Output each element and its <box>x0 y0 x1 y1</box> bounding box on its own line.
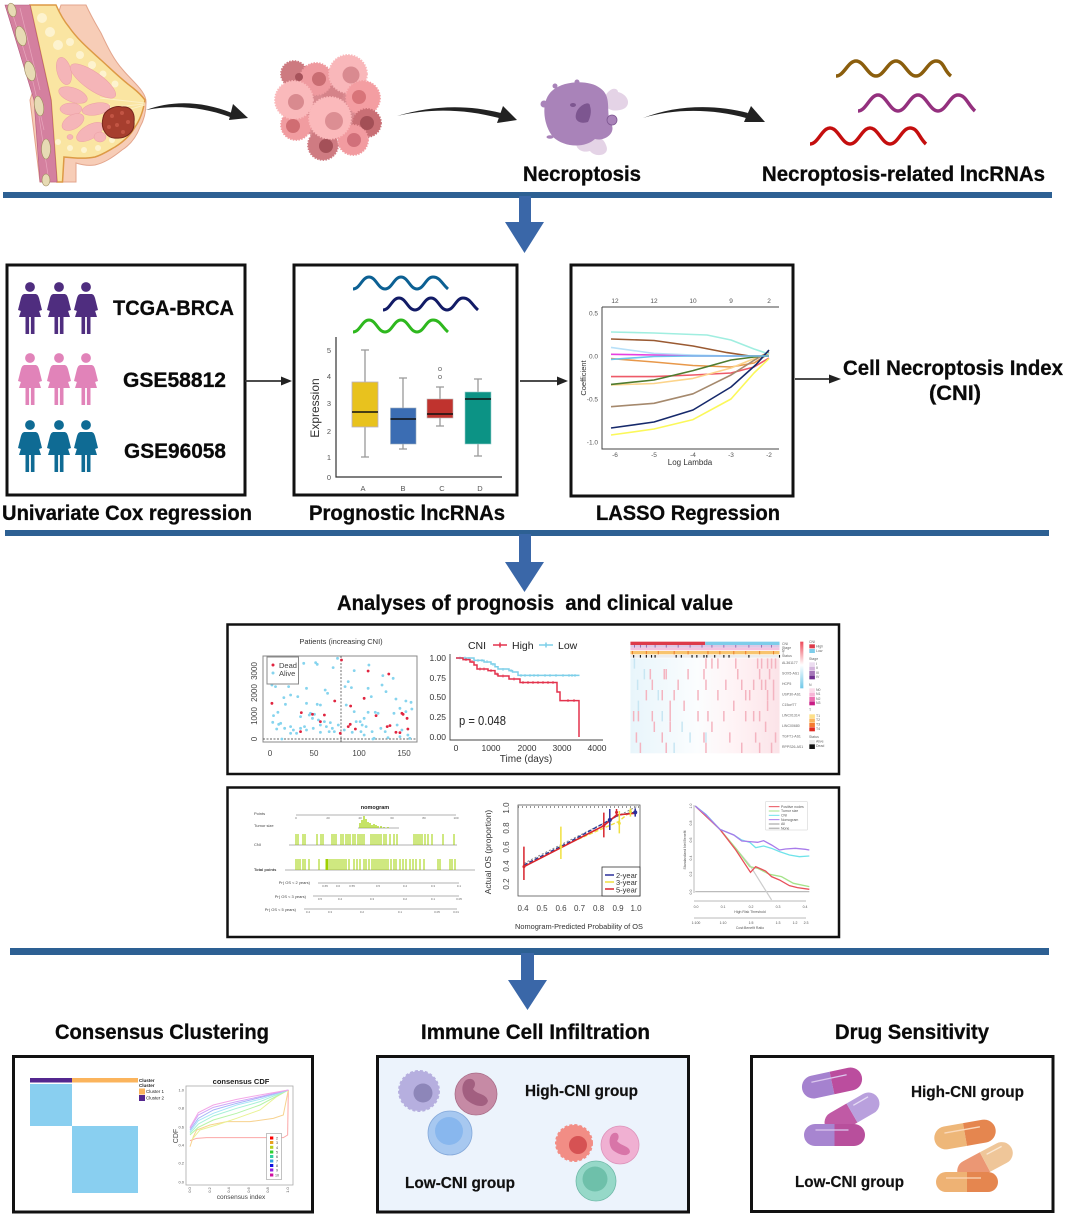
heatmap: C15orf77 <box>782 703 796 707</box>
consensus heatmap: Cluster 1 <box>146 1089 165 1094</box>
box plot: 4 <box>327 372 331 381</box>
heatmap: T4 <box>816 727 820 731</box>
nomogram: 80 <box>422 816 426 820</box>
consensus heatmap: Cluster <box>139 1083 155 1088</box>
consensus heatmap: Cluster <box>139 1078 155 1083</box>
CDF legend: 9 <box>276 1168 278 1172</box>
scatter legend <box>267 657 298 684</box>
decision curve: 0.8 <box>689 821 693 825</box>
consensus heatmap: Cluster 2 <box>146 1096 165 1100</box>
icon: red immune cell <box>556 1125 592 1161</box>
heatmap: Status <box>782 654 792 658</box>
nomogram: 40 <box>358 816 362 820</box>
LASSO coefficient chart: Log Lambda <box>668 458 713 467</box>
nomogram: Points <box>254 811 265 816</box>
nomogram: 0.3 <box>431 884 435 888</box>
decision curve: Nomogram <box>781 818 798 822</box>
CDF legend: 3 <box>276 1141 278 1145</box>
heading: Cell Necroptosis Index (CNI) <box>843 356 1063 405</box>
calibration plot: 0.5 <box>536 904 548 913</box>
box plot: 2 <box>327 427 331 436</box>
decision curve: 0.6 <box>689 838 693 842</box>
heatmap: Alive <box>816 740 824 744</box>
arrow: cells to necroptosis <box>397 106 517 123</box>
nomogram: 0.1 <box>398 910 402 914</box>
scatter plot: patients by CNI: 2000 <box>250 684 259 702</box>
Kaplan-Meier curve: 3000 <box>553 743 572 753</box>
calibration plot: 0.8 <box>502 822 511 834</box>
icon: pink women <box>18 353 98 405</box>
icon: necroptotic cell <box>540 80 628 155</box>
heading: Cell Necroptosis Index (CNI): (CNI) <box>929 381 981 405</box>
nomogram: 0.65 <box>322 884 328 888</box>
heatmap: II <box>816 666 818 670</box>
calibration plot: 1.0 <box>502 802 511 814</box>
arrow: cohorts to lncRNAs <box>245 376 292 386</box>
consensus heatmap <box>30 1078 165 1193</box>
nomogram: 0.01 <box>453 910 459 914</box>
consensus CDF chart: 1.0 <box>285 1186 290 1193</box>
nomogram: 0.3 <box>328 910 332 914</box>
decision curve: 0.4 <box>689 856 693 860</box>
heatmap: T2 <box>816 718 820 722</box>
calibration legend: 5-year <box>616 886 638 894</box>
consensus CDF chart: 0.0 <box>187 1186 192 1193</box>
consensus CDF chart: 0.4 <box>226 1186 231 1193</box>
label: Low-CNI group: Low-CNI group <box>795 1174 904 1191</box>
consensus CDF chart: 1.0 <box>178 1088 185 1092</box>
Kaplan-Meier curve: 1000 <box>482 743 501 753</box>
calibration plot: Actual OS (proportion) <box>483 810 493 894</box>
decision curve: Cost:Benefit Ratio <box>736 926 764 930</box>
Kaplan-Meier curve: 1.00 <box>429 653 446 663</box>
nomogram: 0.05 <box>434 910 440 914</box>
scatter plot: patients by CNI: 150 <box>397 749 411 758</box>
heatmap: USP30-AS1 <box>782 692 801 696</box>
CDF legend: 5 <box>276 1150 278 1154</box>
LASSO coefficient chart: 10 <box>689 298 697 305</box>
decision curve: 1:2 <box>793 921 797 925</box>
LASSO coefficient chart: -1.0 <box>587 440 598 446</box>
decision curve: 1:100 <box>692 921 700 925</box>
scatter plot: patients by CNI: Patients (increasing CNI) <box>299 637 383 646</box>
box plot: 0 <box>327 473 331 482</box>
heatmap <box>630 640 824 753</box>
CDF legend: 8 <box>276 1164 278 1168</box>
decision curve: None <box>781 826 789 830</box>
nomogram: 0.2 <box>360 910 364 914</box>
heatmap: I <box>816 662 817 666</box>
CDF legend: 7 <box>276 1160 278 1164</box>
heatmap: N0 <box>816 688 821 692</box>
heatmap: N <box>809 683 812 687</box>
icon: orange pills <box>932 1118 1017 1192</box>
calibration legend: 3-year <box>616 878 638 887</box>
heatmap: IV <box>816 675 820 679</box>
icon: pink neutrophil <box>601 1126 639 1164</box>
Kaplan-Meier curve: Time (days) <box>500 754 552 765</box>
decision curve: 1.0 <box>689 804 693 808</box>
consensus CDF chart: 0.0 <box>178 1180 185 1184</box>
LASSO coefficient chart: -2 <box>766 452 772 459</box>
nomogram: 0.55 <box>349 884 355 888</box>
heading: Univariate Cox regression: Univariate Cox regression <box>2 501 252 525</box>
arrow: LASSO to CNI <box>795 374 841 384</box>
Kaplan-Meier curve: High <box>512 640 534 652</box>
heatmap: N <box>782 648 785 652</box>
heatmap: CNI <box>809 640 815 644</box>
heading: Necroptosis-related lncRNAs: Necroptosis-related lncRNAs <box>762 162 1045 186</box>
Kaplan-Meier curve: 0.50 <box>429 692 446 702</box>
heatmap: Dead <box>816 744 824 748</box>
Kaplan-Meier curve: 4000 <box>588 743 607 753</box>
Kaplan-Meier curve: 0.75 <box>429 673 446 683</box>
heatmap: HCP5 <box>782 682 791 686</box>
heatmap: CNI <box>782 642 788 646</box>
heading: Prognostic lncRNAs: Prognostic lncRNAs <box>309 501 505 525</box>
consensus CDF chart: CDF <box>173 1129 180 1143</box>
LASSO coefficient chart: -4 <box>690 452 696 459</box>
decision curve: 1:3 <box>776 921 780 925</box>
heatmap: Stage <box>782 646 791 650</box>
heading: Drug Sensitivity: Drug Sensitivity <box>835 1020 989 1044</box>
box plot: 5 <box>327 346 331 355</box>
panel: prognostic lncRNAs box plot <box>294 265 517 495</box>
divider bar 3 <box>10 948 1049 955</box>
heatmap: LINC00680 <box>782 724 800 728</box>
decision curve: All <box>781 822 785 826</box>
heading: Consensus Clustering: Consensus Clustering <box>55 1020 269 1044</box>
calibration plot: 0.8 <box>593 904 605 913</box>
box plot: C <box>439 484 445 493</box>
scatter plot: patients by CNI <box>250 637 417 758</box>
heatmap: SOX5-AS1 <box>782 672 799 676</box>
icon: teal lymphocyte <box>576 1161 616 1201</box>
consensus CDF chart: 0.4 <box>178 1142 185 1148</box>
heatmap: Stage <box>809 657 818 661</box>
heading: Immune Cell Infiltration: Immune Cell Infiltration <box>421 1020 650 1044</box>
heading: Necroptosis: Necroptosis <box>523 162 641 186</box>
heatmap: III <box>816 671 819 675</box>
heatmap: N2 <box>816 697 821 701</box>
arrow: down 1 <box>505 196 544 253</box>
panel: LASSO regression <box>571 265 793 496</box>
nomogram: Pr( OS < 5 years) <box>265 907 297 912</box>
panel: immune cell infiltration <box>378 1056 688 1212</box>
heatmap: T <box>782 651 785 655</box>
CDF legend: 6 <box>276 1155 278 1159</box>
calibration plot <box>483 802 643 931</box>
LASSO coefficient chart: -0.5 <box>587 396 598 404</box>
panel: consensus clustering <box>14 1056 312 1212</box>
decision curve: 0.2 <box>749 905 753 909</box>
nomogram: 0.05 <box>456 897 462 901</box>
arrow: down 3 <box>508 953 547 1010</box>
panel: prognosis plots <box>228 624 839 774</box>
Kaplan-Meier curve: Low <box>558 640 578 652</box>
decision curve: High Risk Threshold <box>734 910 766 914</box>
heatmap: TGFT1-AS1 <box>782 734 801 738</box>
nomogram: nomogram <box>361 805 389 811</box>
decision curve: 0.0 <box>689 890 693 894</box>
nomogram: 60 <box>390 816 394 820</box>
heatmap: LINC01314 <box>782 714 800 718</box>
consensus CDF chart: 0.2 <box>178 1160 185 1166</box>
nomogram: 0.5 <box>318 897 322 901</box>
decision curve <box>683 802 809 930</box>
nomogram: 20 <box>326 816 330 820</box>
calibration plot: 0.7 <box>574 904 586 913</box>
scatter plot: patients by CNI: 0 <box>268 749 273 758</box>
heatmap: Status <box>809 735 819 739</box>
arrow: necroptosis to lncRNAs <box>643 106 765 122</box>
box plot: D <box>477 484 483 493</box>
decision curve: 0.1 <box>721 905 725 909</box>
icon: blue lymphocyte <box>428 1111 472 1155</box>
nomogram: 0.3 <box>370 897 374 901</box>
scatter plot: patients by CNI: 50 <box>310 749 319 758</box>
icon: purple pills <box>800 1065 883 1146</box>
scatter plot: patients by CNI: 3000 <box>250 662 259 680</box>
calibration plot: 0.9 <box>612 904 624 913</box>
nomogram: 0.5 <box>376 884 380 888</box>
Kaplan-Meier curve <box>429 640 607 765</box>
decision curve: 1:5 <box>749 921 753 925</box>
nomogram: 0.4 <box>338 897 342 901</box>
label: GSE58812: GSE58812 <box>123 368 226 392</box>
calibration plot: 0.2 <box>502 878 511 890</box>
calibration plot: 1.0 <box>630 904 642 913</box>
calibration plot: 0.6 <box>502 841 511 853</box>
nomogram: 0.4 <box>306 910 310 914</box>
LASSO coefficient chart: 9 <box>729 298 733 305</box>
consensus CDF chart: 0.8 <box>178 1106 185 1110</box>
decision curve: Positive nodes <box>781 805 804 809</box>
LASSO coefficient chart: -3 <box>728 452 734 459</box>
scatter plot: patients by CNI: 1000 <box>250 707 259 725</box>
nomogram: 0.6 <box>336 884 340 888</box>
decision curve: Tumor size <box>781 809 798 813</box>
box plot: A <box>360 484 366 493</box>
Kaplan-Meier curve: 0.00 <box>429 732 446 742</box>
LASSO coefficient chart: Coefficient <box>579 359 588 396</box>
heatmap: N1 <box>816 692 821 696</box>
arrow: breast to cells <box>146 103 248 120</box>
decision curve: CNI <box>781 814 787 818</box>
icon: mauve neutrophil <box>455 1073 497 1115</box>
consensus CDF chart: consensus CDF <box>213 1077 270 1086</box>
consensus CDF chart: 0.8 <box>265 1186 270 1193</box>
CDF legend: 2 <box>276 1136 278 1140</box>
Kaplan-Meier curve: CNI <box>468 640 486 652</box>
heading: Analyses of prognosis and clinical value: Analyses of prognosis and clinical value <box>337 591 733 615</box>
decision curve: 1:10 <box>720 921 726 925</box>
heading: LASSO Regression: LASSO Regression <box>596 501 780 525</box>
heatmap: T3 <box>816 722 820 726</box>
decision curve: 0.4 <box>803 905 807 909</box>
LASSO coefficient chart: -6 <box>612 452 618 459</box>
label: GSE96058: GSE96058 <box>124 439 226 463</box>
nomogram: 0.4 <box>403 884 407 888</box>
box plot: B <box>400 484 406 493</box>
decision curve: 0.0 <box>694 905 698 909</box>
box plot <box>308 337 502 493</box>
icon: breast with tumor <box>5 2 146 186</box>
panel: drug sensitivity <box>752 1056 1053 1212</box>
consensus CDF chart: 0.2 <box>207 1186 212 1193</box>
box plot: Expression <box>308 378 322 438</box>
LASSO coefficient chart: 0.5 <box>589 310 598 318</box>
LASSO coefficient chart: -5 <box>651 452 657 459</box>
scatter legend: Dead <box>279 661 297 670</box>
heatmap: T <box>809 708 812 712</box>
LASSO coefficient chart: 0.0 <box>589 354 598 360</box>
LASSO coefficient chart: 12 <box>650 298 658 305</box>
Kaplan-Meier curve: 0.25 <box>429 712 446 722</box>
decision curve: 0.2 <box>689 872 693 876</box>
LASSO coefficient chart <box>579 298 779 467</box>
heatmap: N3 <box>816 701 821 705</box>
icon: purple immune cell <box>399 1071 439 1111</box>
CDF legend: 4 <box>276 1146 278 1150</box>
calibration legend: 2-year <box>616 871 638 880</box>
icon: purple women <box>18 282 98 334</box>
box plot: 3 <box>327 399 331 408</box>
box plot: 1 <box>327 453 331 462</box>
scatter legend: Alive <box>279 669 295 678</box>
nomogram: 0.1 <box>457 884 461 888</box>
nomogram: 0 <box>295 816 297 820</box>
CDF legend: 10 <box>275 1174 279 1178</box>
consensus CDF chart: consensus index <box>217 1194 266 1201</box>
nomogram <box>254 805 475 914</box>
icon: teal women <box>18 420 98 472</box>
nomogram: Pr( OS < 2 years) <box>279 880 311 885</box>
nomogram: Total points <box>254 867 277 872</box>
consensus CDF chart <box>173 1077 293 1201</box>
label: TCGA-BRCA: TCGA-BRCA <box>113 296 234 320</box>
LASSO coefficient chart: 2 <box>767 298 771 305</box>
calibration legend <box>602 867 640 896</box>
label: High-CNI group: High-CNI group <box>911 1084 1024 1101</box>
calibration plot: Nomogram-Predicted Probability of OS <box>515 922 643 931</box>
decision curve: Standardized Net Benefit <box>683 831 687 869</box>
heatmap: T1 <box>816 714 820 718</box>
nomogram: Pr( OS < 3 years) <box>275 894 307 899</box>
heatmap: AL361177 <box>782 661 798 665</box>
nomogram: 0.1 <box>431 897 435 901</box>
icon: tumor cell cluster <box>275 55 381 160</box>
label: High-CNI group: High-CNI group <box>525 1083 638 1100</box>
calibration plot: 0.4 <box>502 860 511 872</box>
arrow: down 2 <box>505 534 544 592</box>
LASSO coefficient chart: 12 <box>611 298 619 305</box>
consensus CDF chart: 0.6 <box>178 1124 185 1130</box>
nomogram: Tumor size <box>254 823 274 828</box>
heatmap: High <box>816 644 823 648</box>
calibration plot: 0.6 <box>555 904 567 913</box>
CDF legend <box>266 1134 282 1180</box>
nomogram: 100 <box>453 816 459 820</box>
Kaplan-Meier curve: 2000 <box>518 743 537 753</box>
decision curve: 2:3 <box>804 921 808 925</box>
icon: lncRNA strands <box>810 61 975 144</box>
label: Low-CNI group: Low-CNI group <box>405 1175 515 1192</box>
calibration plot: 0.4 <box>517 904 529 913</box>
decision curve: 0.3 <box>776 905 780 909</box>
consensus CDF chart: 0.6 <box>246 1186 251 1193</box>
scatter plot: patients by CNI: 100 <box>352 749 366 758</box>
panel: cohorts <box>7 265 245 495</box>
nomogram: 0.2 <box>403 897 407 901</box>
divider bar 1 <box>3 192 1052 198</box>
scatter plot: patients by CNI: 0 <box>250 736 259 741</box>
panel: nomogram, calibration and DCA <box>228 788 839 937</box>
nomogram: CNI <box>254 842 261 847</box>
Kaplan-Meier curve: p = 0.048 <box>459 714 506 728</box>
icon: lncRNA strands <box>353 277 478 332</box>
arrow: lncRNAs to LASSO <box>520 376 568 386</box>
heatmap: Low <box>816 649 823 653</box>
divider bar 2 <box>5 530 1049 536</box>
Kaplan-Meier curve: 0 <box>454 743 459 753</box>
heatmap: RPPS26-AS1 <box>782 745 803 749</box>
